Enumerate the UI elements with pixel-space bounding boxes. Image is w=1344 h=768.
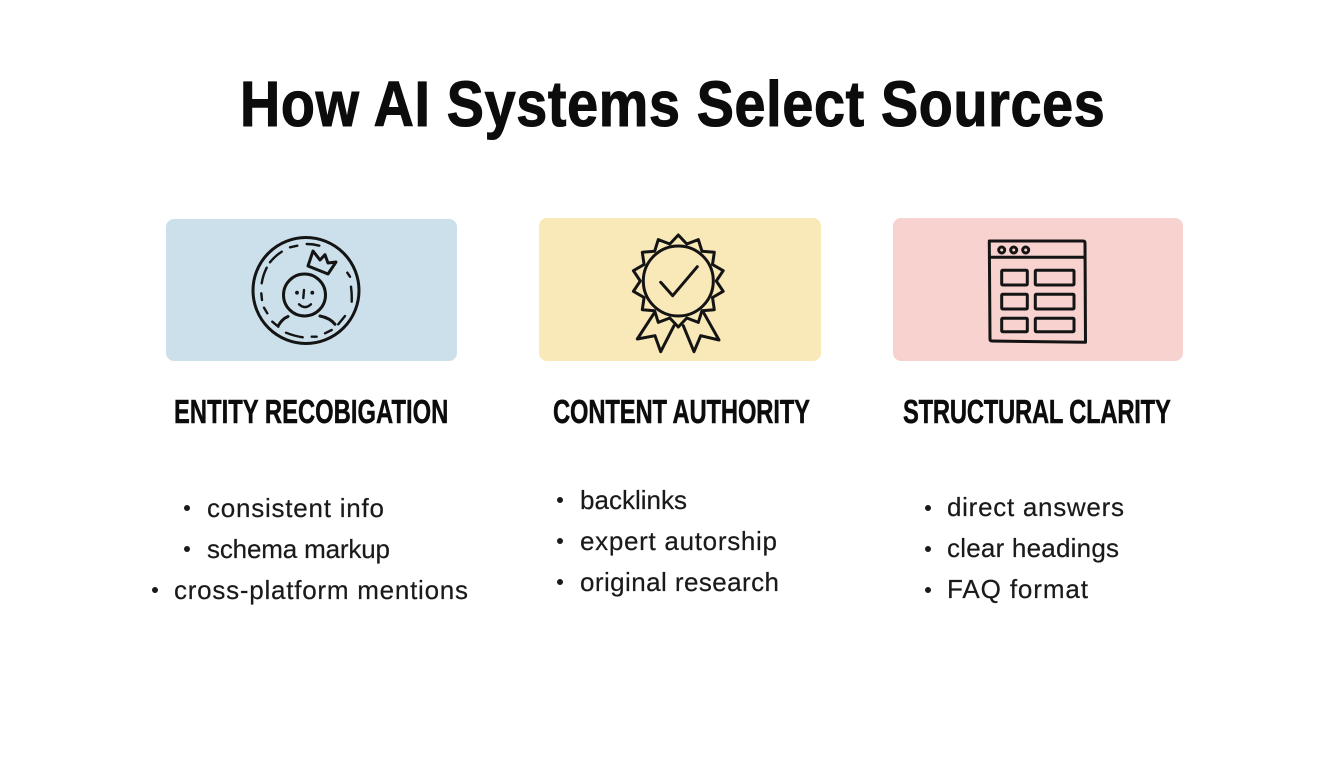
- title: How AI Systems Select Sources: [240, 68, 1105, 140]
- bullet list: original research: [580, 567, 779, 597]
- bullet list: consistent info: [207, 493, 384, 523]
- panel: structural clarity: [893, 218, 1183, 604]
- icon: face in a circle with crown: [253, 238, 359, 344]
- panel: content authority: [539, 218, 821, 597]
- heading: ENTITY RECOBIGATION: [174, 394, 448, 431]
- pink icon card: [893, 218, 1183, 361]
- bullet list: [557, 485, 779, 597]
- heading: STRUCTURAL CLARITY: [903, 394, 1171, 431]
- bullet list: direct answers: [947, 492, 1124, 522]
- bullet list: [925, 492, 1124, 604]
- bullet list: FAQ format: [947, 574, 1089, 604]
- heading: CONTENT AUTHORITY: [553, 394, 810, 431]
- bullet list: clear headings: [947, 533, 1119, 563]
- icon: award rosette with check mark: [633, 235, 723, 352]
- bullet list: [152, 493, 468, 605]
- bullet list: expert autorship: [580, 526, 777, 556]
- bullet list: backlinks: [580, 485, 687, 515]
- bullet list: cross-platform mentions: [174, 575, 468, 605]
- blue icon card: [166, 219, 457, 361]
- panel: entity recognition: [152, 219, 468, 605]
- bullet list: schema markup: [207, 534, 390, 564]
- icon: web page layout: [989, 241, 1086, 342]
- yellow icon card: [539, 218, 821, 361]
